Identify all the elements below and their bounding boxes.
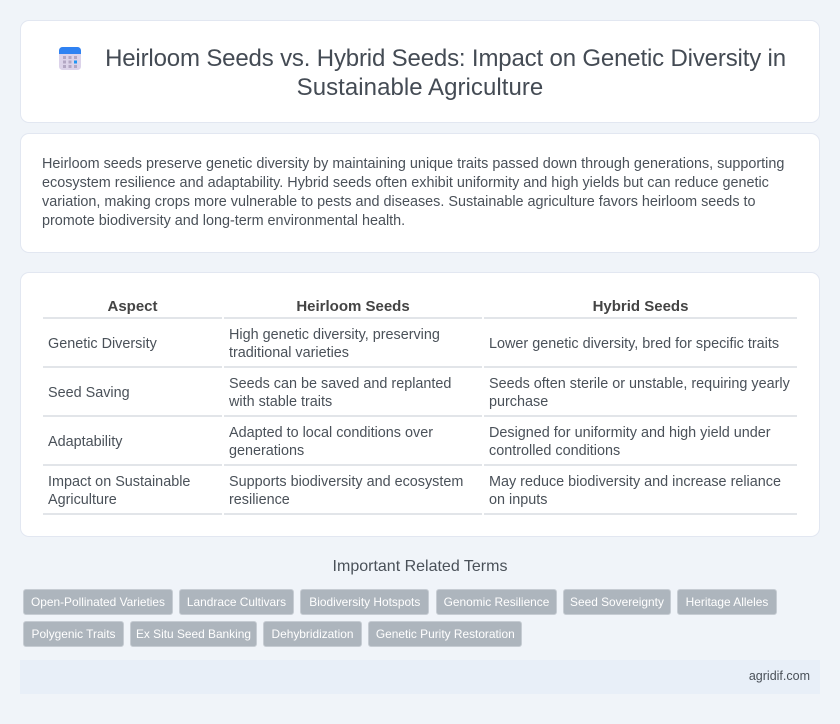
icon: calendar [59, 47, 81, 70]
tag: Seed Sovereignty [570, 595, 664, 609]
tag [677, 589, 777, 615]
row: Impact on Sustainable Agriculture: Impact on Sustainable [48, 474, 190, 490]
heading: related terms: Important Related Terms [333, 558, 507, 575]
table header: Aspect [107, 298, 158, 315]
text block: introduction: ecosystem resilience and adaptability. Hybrid seeds often exhibit uniformity and high yields but can reduce genetic [42, 175, 769, 191]
title [105, 45, 786, 101]
tag: Dehybridization [272, 627, 353, 641]
row: Adaptability: controlled conditions [489, 443, 620, 459]
footer [20, 660, 820, 694]
text block: introduction [42, 156, 784, 229]
row: Adaptability: Adaptability [48, 434, 122, 450]
tag: Landrace Cultivars [187, 595, 286, 609]
row: Adaptability: Designed for uniformity and high yield under [489, 425, 771, 441]
row: Seed Saving: purchase [489, 394, 548, 410]
row: Genetic Diversity: High genetic diversity, preserving [229, 327, 440, 343]
row: Genetic Diversity: traditional varieties [229, 345, 349, 361]
tag: Genomic Resilience [444, 595, 549, 609]
row: Adaptability [48, 425, 771, 459]
row: Seed Saving [48, 376, 790, 410]
row: Genetic Diversity [48, 327, 779, 361]
panel: introduction [20, 133, 820, 253]
tag [263, 621, 362, 647]
row: Genetic Diversity: Lower genetic diversity, bred for specific traits [489, 336, 779, 352]
panel: header [20, 20, 820, 123]
tag: Ex Situ Seed Banking [136, 627, 251, 641]
row: Impact on Sustainable Agriculture: May reduce biodiversity and increase reliance [489, 474, 781, 490]
tag [368, 621, 522, 647]
text block: introduction: variation, making crops more vulnerable to pests and diseases. Sustainable agriculture favors heirloom seeds to [42, 194, 756, 210]
tag [179, 589, 294, 615]
row: Seed Saving: Seeds can be saved and replanted [229, 376, 451, 392]
tags: related terms [23, 589, 777, 647]
row: Impact on Sustainable Agriculture: Agriculture [48, 492, 117, 508]
row: Impact on Sustainable Agriculture: on inputs [489, 492, 547, 508]
table header [107, 298, 688, 315]
tag: Biodiversity Hotspots [309, 595, 420, 609]
row: Genetic Diversity: Genetic Diversity [48, 336, 157, 352]
table header: Heirloom Seeds [296, 298, 410, 315]
tag [130, 621, 257, 647]
row: Seed Saving: with stable traits [229, 394, 332, 410]
tag [23, 621, 124, 647]
row: Seed Saving: Seeds often sterile or unstable, requiring yearly [489, 376, 790, 392]
row: Adaptability: Adapted to local conditions over [229, 425, 433, 441]
tag [300, 589, 429, 615]
row: Impact on Sustainable Agriculture: resilience [229, 492, 290, 508]
row: Seed Saving: Seed Saving [48, 385, 130, 401]
footer: source: agridif.com [749, 669, 810, 683]
tag [23, 589, 173, 615]
title: Sustainable Agriculture [297, 74, 543, 101]
row: Impact on Sustainable Agriculture [48, 474, 781, 508]
tag [436, 589, 557, 615]
tag: Open-Pollinated Varieties [31, 595, 165, 609]
panel: comparison table [20, 272, 820, 537]
text block: introduction: Heirloom seeds preserve genetic diversity by maintaining unique traits passed down through generations, supporting [42, 156, 784, 172]
row: Impact on Sustainable Agriculture: Supports biodiversity and ecosystem [229, 474, 463, 490]
tag [563, 589, 671, 615]
title: Heirloom Seeds vs. Hybrid Seeds: Impact on Genetic Diversity in [105, 45, 786, 72]
tag: Heritage Alleles [686, 595, 768, 609]
tag: Polygenic Traits [32, 627, 115, 641]
tag: Genetic Purity Restoration [376, 627, 515, 641]
row: Adaptability: generations [229, 443, 304, 459]
table header: Hybrid Seeds [593, 298, 688, 315]
text block: introduction: promote biodiversity and long-term environmental health. [42, 213, 405, 229]
